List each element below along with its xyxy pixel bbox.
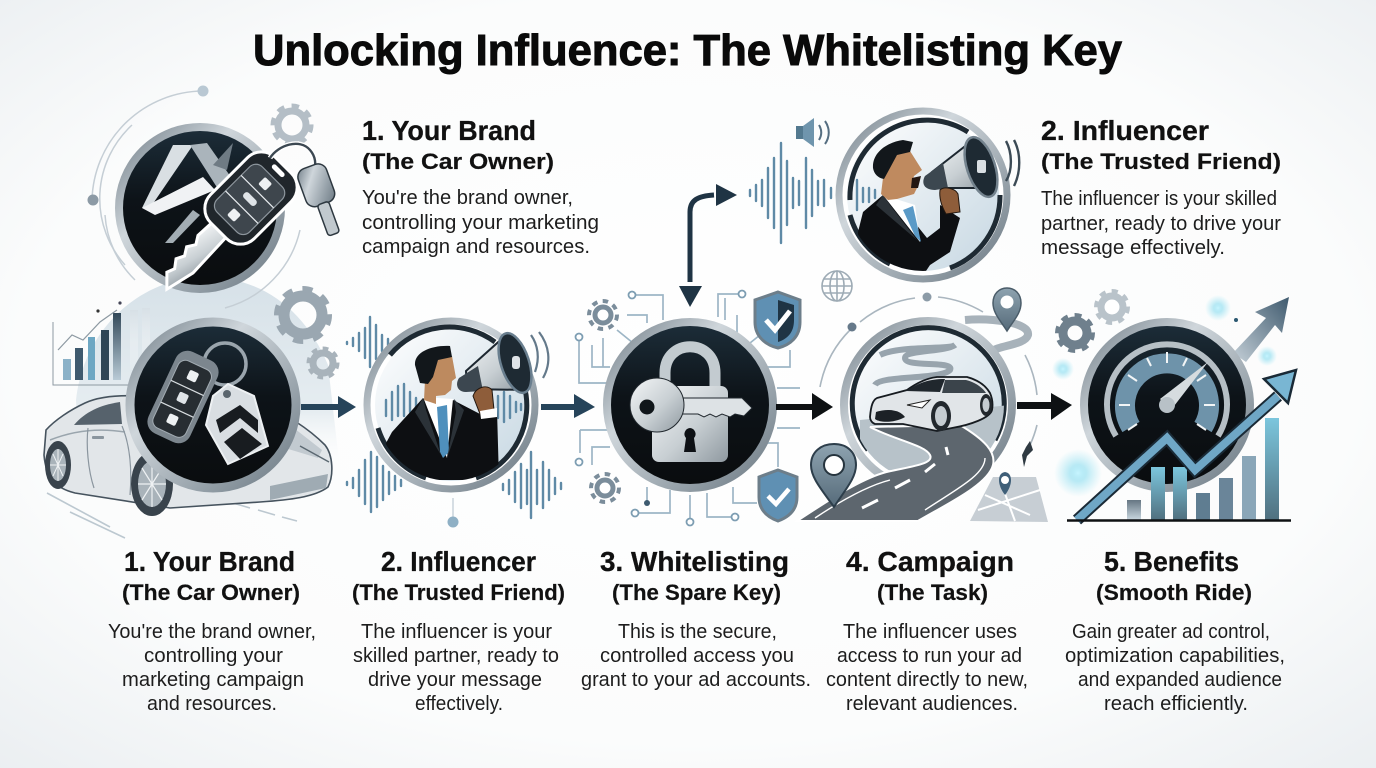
- chart: bars and rising arrow: [1067, 370, 1296, 520]
- text block: top influencer: message effectively.: [1041, 237, 1225, 259]
- column: 3 whitelisting: controlled access you: [600, 645, 794, 667]
- column: 4 campaign: The influencer uses: [843, 621, 1017, 643]
- icon: map: [970, 477, 1048, 522]
- icon: fob and tag: [143, 343, 268, 464]
- text block: top brand: You're the brand owner,: [362, 187, 573, 209]
- column: 1 your brand: controlling your: [144, 645, 283, 667]
- text block: top brand: 1. Your Brand: [362, 115, 536, 146]
- arrow: step 2 to 3: [541, 394, 595, 418]
- column: 4 campaign: 4. Campaign: [846, 546, 1014, 577]
- face: [881, 151, 922, 200]
- text block: top influencer: The influencer is your skilled: [1041, 188, 1277, 210]
- column: 2 influencer: effectively.: [415, 693, 503, 715]
- illustration: step 4 campaign road: [797, 271, 1048, 522]
- column: 1 your brand: 1. Your Brand: [124, 546, 295, 577]
- column: 5 benefits: and expanded audience: [1078, 669, 1282, 691]
- arrow: step 4 to 5: [1017, 393, 1072, 420]
- text block: top brand: (The Car Owner): [362, 149, 554, 174]
- illustration: step 3 whitelisting circuit and lock: [576, 290, 800, 526]
- column: 3 whitelisting: (The Spare Key): [612, 580, 781, 605]
- illustration: step 1 car and fob: [44, 289, 338, 538]
- column: 1 your brand: [108, 546, 316, 715]
- column: 2 influencer: 2. Influencer: [381, 546, 536, 577]
- arrow head: down: [679, 286, 702, 307]
- text block: top brand: [362, 115, 599, 258]
- column: 2 influencer: skilled partner, ready to: [353, 645, 559, 667]
- icon: speaker: [796, 118, 829, 147]
- icon: silver car: [44, 396, 332, 516]
- illustration: top influencer: [750, 111, 1019, 280]
- column: 1 your brand: You're the brand owner,: [108, 621, 316, 643]
- column: 2 influencer: drive your message: [368, 669, 542, 691]
- column: 3 whitelisting: [581, 546, 811, 691]
- icon: pin left: [811, 444, 856, 507]
- jacket: [858, 196, 960, 271]
- column: 4 campaign: [826, 546, 1028, 715]
- icon: lock and key: [630, 347, 752, 462]
- column: 5 benefits: [1065, 546, 1285, 715]
- icon: car: [870, 377, 993, 431]
- column: 5 benefits: optimization capabilities,: [1065, 645, 1285, 667]
- column: 4 campaign: content directly to new,: [826, 669, 1028, 691]
- face: [424, 356, 456, 404]
- column: 5 benefits: reach efficiently.: [1104, 693, 1248, 715]
- arrow: step 3 to 4: [776, 393, 833, 420]
- text block: top brand: campaign and resources.: [362, 236, 590, 258]
- icon: speedometer: [1107, 344, 1227, 436]
- column: 1 your brand: marketing campaign: [122, 669, 304, 691]
- icon: car key: [141, 144, 305, 308]
- column: 3 whitelisting: 3. Whitelisting: [600, 546, 789, 577]
- text block: top influencer: [1041, 115, 1281, 259]
- column: 4 campaign: access to run your ad: [837, 645, 1022, 667]
- hair: [873, 140, 913, 179]
- column: 4 campaign: (The Task): [877, 580, 988, 605]
- illustration: step 2 influencer: [347, 317, 561, 528]
- megaphone: [466, 336, 527, 390]
- column: 2 influencer: (The Trusted Friend): [352, 580, 565, 605]
- title: Unlocking Influence: The Whitelisting Key: [253, 27, 1122, 75]
- arrow head: right: [716, 184, 737, 206]
- column: 3 whitelisting: This is the secure,: [618, 621, 777, 643]
- hair: [415, 346, 452, 384]
- text block: top influencer: partner, ready to drive your: [1041, 213, 1281, 235]
- jacket: [385, 398, 499, 480]
- icon: pin right: [993, 288, 1021, 331]
- background dome behind brand illustrations: [76, 277, 340, 470]
- text block: top influencer: 2. Influencer: [1041, 115, 1209, 146]
- column: 5 benefits: 5. Benefits: [1104, 546, 1239, 577]
- icon: shield bottom: [759, 470, 797, 521]
- icon: globe: [822, 271, 852, 301]
- column: 5 benefits: (Smooth Ride): [1096, 580, 1252, 605]
- column: 1 your brand: and resources.: [147, 693, 277, 715]
- column: 2 influencer: [352, 546, 565, 715]
- illustration: step 5 benefits gauge: [1052, 291, 1296, 520]
- megaphone: [932, 140, 993, 188]
- column: 2 influencer: The influencer is your: [361, 621, 552, 643]
- illustration: top brand key circle: [88, 86, 348, 308]
- arrow: step 1 to 2: [301, 396, 356, 418]
- chart: [53, 301, 150, 385]
- arrow: whitelisting up and right: [690, 195, 714, 282]
- column: 5 benefits: Gain greater ad control,: [1072, 621, 1270, 643]
- text block: top influencer: (The Trusted Friend): [1041, 149, 1281, 174]
- column: 3 whitelisting: grant to your ad accounts.: [581, 669, 811, 691]
- text block: top brand: controlling your marketing: [362, 212, 599, 234]
- column: 4 campaign: relevant audiences.: [846, 693, 1018, 715]
- column: 1 your brand: (The Car Owner): [122, 580, 300, 605]
- icon: shield top: [755, 292, 800, 348]
